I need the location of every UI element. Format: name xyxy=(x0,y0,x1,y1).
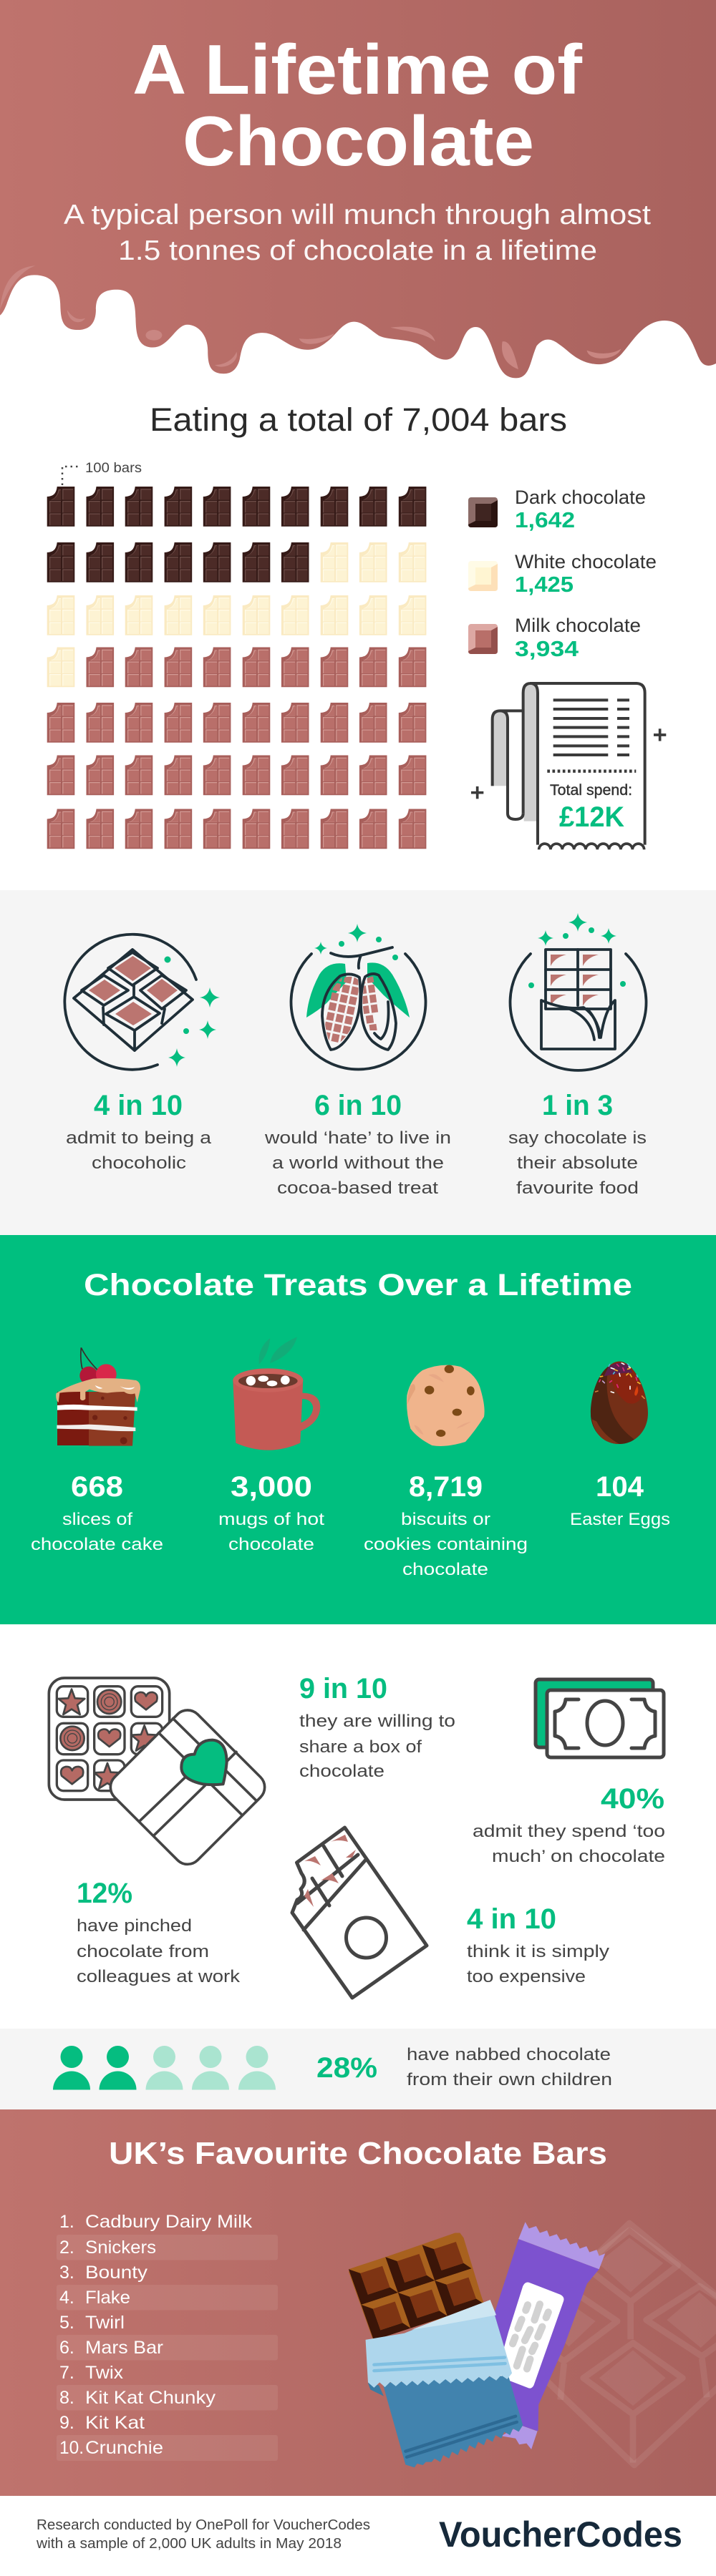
stat: 6 in 10: cocoa-based treat xyxy=(277,1179,438,1198)
stat: mugs: chocolate xyxy=(228,1535,314,1554)
stat: 1 in 3: 1 in 3 xyxy=(542,1090,613,1121)
stat: 12%: have pinched xyxy=(77,1916,192,1936)
illustration: chocolate pattern and bars xyxy=(349,2222,716,2467)
list: top ten bars: Flake xyxy=(85,2288,130,2308)
stat: 9 in 10: share a box of xyxy=(299,1737,422,1757)
list: top ten bars: Snickers xyxy=(85,2238,156,2258)
panel: chocoholic stats xyxy=(0,890,716,1235)
legend: milk chocolate: 3,934 xyxy=(515,636,579,661)
stat: 6 in 10: 6 in 10 xyxy=(314,1090,402,1121)
legend: dark chocolate: Dark chocolate xyxy=(515,487,646,508)
illustration: cookie xyxy=(407,1365,485,1446)
title: A Lifetime of xyxy=(132,30,582,109)
illustration: easter egg xyxy=(591,1362,648,1444)
list: top ten bars: 8. xyxy=(59,2388,74,2408)
stat: 28% xyxy=(316,2045,612,2089)
icon: receipt with total spend xyxy=(471,683,666,849)
stat: 6 in 10: would ‘hate’ to live in xyxy=(264,1128,451,1148)
stat: 9 in 10: 9 in 10 xyxy=(299,1673,387,1704)
icon: chocolate squares in circle xyxy=(64,935,220,1070)
logo: VoucherCodes: VoucherCodes xyxy=(439,2514,682,2555)
footer: source note xyxy=(36,2517,370,2552)
panel: children stat band xyxy=(0,2029,716,2110)
panel: chocolate treats xyxy=(0,1235,716,1624)
stat: 12%: 12% xyxy=(77,1878,132,1909)
stat: 9 in 10: chocolate xyxy=(299,1762,384,1781)
stat: 4 in 10: 4 in 10 xyxy=(94,1090,183,1121)
stat: 12%: chocolate from xyxy=(77,1942,209,1961)
stat: 6 in 10: a world without the xyxy=(272,1153,444,1173)
stat: biscuits: 8,719 xyxy=(409,1471,483,1503)
stat: 4 in 10: admit to being a xyxy=(66,1128,212,1148)
title: Chocolate xyxy=(183,102,534,180)
panel: favourite chocolate bars xyxy=(0,2109,716,2496)
list: top ten bars: 9. xyxy=(59,2413,74,2433)
illustration: cake xyxy=(56,1347,140,1446)
stat: easter eggs: Easter Eggs xyxy=(570,1510,670,1529)
bar chart: pictogram of chocolate bars xyxy=(47,487,426,849)
stat: biscuits xyxy=(364,1471,528,1579)
stat: 9 in 10: they are willing to xyxy=(299,1712,455,1731)
stat: 1 in 3 xyxy=(508,1090,647,1198)
stat: 40%: much’ on chocolate xyxy=(492,1847,665,1866)
stat: 1 in 3: favourite food xyxy=(516,1179,639,1198)
legend: dark chocolate: 1,642 xyxy=(515,507,575,532)
stat: 4 in 10: chocoholic xyxy=(92,1153,186,1173)
subtitle: 1.5 tonnes of chocolate in a lifetime xyxy=(118,235,597,266)
stat: 28%: from their own children xyxy=(407,2070,612,2089)
icon: chocolate box xyxy=(49,1678,271,1870)
footer: source note: Research conducted by OnePoll for VoucherCodes xyxy=(37,2517,370,2533)
stat: 12%: colleagues at work xyxy=(77,1967,241,1986)
footer: source note: with a sample of 2,000 UK adults in May 2018 xyxy=(36,2536,342,2552)
stat: 6 in 10 xyxy=(264,1090,451,1198)
list: top ten bars xyxy=(57,2212,278,2461)
icon: cocoa pods in circle xyxy=(291,924,425,1069)
stat: 4 in 10 expensive xyxy=(467,1903,609,1986)
stat: 40% xyxy=(473,1783,665,1866)
stat: 4 in 10 xyxy=(66,1090,212,1173)
stat: 1 in 3: their absolute xyxy=(517,1153,638,1173)
list: top ten bars: Twirl xyxy=(85,2313,125,2333)
stat: biscuits: chocolate xyxy=(402,1560,488,1579)
list: top ten bars: Cadbury Dairy Milk xyxy=(85,2212,253,2232)
stat: 1 in 3: say chocolate is xyxy=(508,1128,647,1148)
list: top ten bars: 7. xyxy=(59,2363,74,2383)
stat: mugs: mugs of hot xyxy=(218,1510,324,1529)
title xyxy=(132,30,582,180)
stat: 12% xyxy=(77,1878,241,1986)
legend: white chocolate: White chocolate xyxy=(515,551,657,572)
stat: biscuits: cookies containing xyxy=(364,1535,528,1554)
illustration: hot chocolate mug xyxy=(233,1337,320,1450)
stat: 9 in 10 xyxy=(299,1673,455,1781)
list: top ten bars: 2. xyxy=(59,2238,74,2258)
stat: 4 in 10 expensive: think it is simply xyxy=(467,1942,609,1961)
icon: banknotes xyxy=(536,1679,664,1757)
heading: favourite bars: UK’s Favourite Chocolate Bars xyxy=(109,2136,607,2171)
stat: 28%: 28% xyxy=(316,2052,377,2084)
stat: easter eggs xyxy=(570,1471,670,1529)
stat: 40%: 40% xyxy=(601,1783,664,1815)
stat: 28%: have nabbed chocolate xyxy=(407,2045,611,2064)
stat: cake slices: slices of xyxy=(62,1510,132,1529)
list: top ten bars: Kit Kat Chunky xyxy=(85,2388,216,2408)
subtitle xyxy=(64,200,651,266)
stat: 4 in 10 expensive: too expensive xyxy=(467,1967,586,1986)
stat: 40%: admit they spend ‘too xyxy=(473,1822,665,1841)
header panel: melting chocolate xyxy=(0,0,716,378)
stat: biscuits: biscuits or xyxy=(401,1510,490,1529)
heading: treats: Chocolate Treats Over a Lifetime xyxy=(84,1268,632,1302)
list: top ten bars: 1. xyxy=(59,2212,74,2232)
list: top ten bars: Crunchie xyxy=(85,2438,163,2458)
subtitle: A typical person will munch through almost xyxy=(64,200,651,230)
list: top ten bars: Kit Kat xyxy=(85,2413,145,2433)
icon: receipt with total spend: £12K xyxy=(559,801,624,833)
stat: cake slices: chocolate cake xyxy=(31,1535,163,1554)
icon: receipt with total spend: Total spend: xyxy=(550,782,632,799)
list: top ten bars: 10. xyxy=(59,2438,84,2458)
legend: dark chocolate xyxy=(468,487,646,532)
legend: milk chocolate: Milk chocolate xyxy=(515,615,641,636)
list: top ten bars: Bounty xyxy=(85,2263,148,2283)
heading: eating a total: Eating a total of 7,004 bars xyxy=(150,401,567,438)
stat: mugs: 3,000 xyxy=(231,1471,312,1503)
icon: bitten chocolate bar xyxy=(292,1828,427,1998)
stat: easter eggs: 104 xyxy=(596,1471,644,1503)
legend: white chocolate xyxy=(468,551,657,597)
list: top ten bars: 6. xyxy=(59,2338,74,2358)
list: top ten bars: Twix xyxy=(85,2363,124,2383)
stat: mugs xyxy=(218,1471,324,1554)
list: top ten bars: Mars Bar xyxy=(85,2338,163,2358)
list: top ten bars: 3. xyxy=(59,2263,74,2283)
icon: wrapped chocolate bar in circle xyxy=(510,913,646,1070)
stat: 4 in 10 expensive: 4 in 10 xyxy=(467,1903,556,1935)
stat: cake slices xyxy=(31,1471,163,1554)
legend: white chocolate: 1,425 xyxy=(515,572,574,597)
list: top ten bars: 4. xyxy=(59,2288,74,2308)
legend: milk chocolate xyxy=(468,615,641,661)
stat: cake slices: 668 xyxy=(71,1471,123,1503)
pictogram: 100 bars key: 100 bars xyxy=(85,461,142,476)
pictogram: 100 bars key xyxy=(62,461,142,485)
list: top ten bars: 5. xyxy=(59,2313,74,2333)
icon: people 28% xyxy=(53,2046,276,2089)
